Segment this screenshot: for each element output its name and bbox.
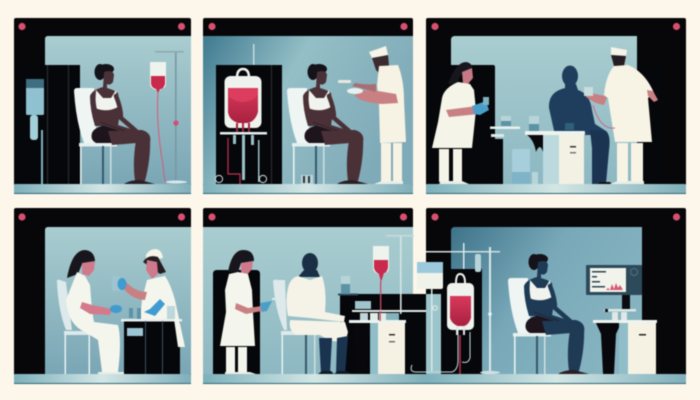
black cabinet xyxy=(14,65,80,184)
black cabinets xyxy=(426,65,665,184)
dark patient xyxy=(549,66,612,184)
seated nurse xyxy=(66,250,126,374)
large blood bag xyxy=(447,274,474,374)
desk with devices and white cabinet xyxy=(593,309,657,374)
nurse with blue glove xyxy=(220,250,279,374)
right nurse with cup and tube xyxy=(584,47,658,184)
pink corner dots xyxy=(18,23,185,30)
chair xyxy=(57,280,97,374)
chair and dark patient xyxy=(508,254,589,374)
panel: donor seated with IV bag xyxy=(14,18,191,194)
pink corner dots xyxy=(431,23,680,30)
panel: nurse preparing donor beside large blood bag xyxy=(203,18,413,194)
black cabinet xyxy=(216,65,282,184)
patient in white xyxy=(286,253,352,374)
floor xyxy=(203,184,413,194)
black screen behind nurse xyxy=(213,270,260,374)
shelf with tubes and wheels xyxy=(215,132,267,194)
desk with white cabinet xyxy=(349,320,406,374)
pink corner dots xyxy=(208,213,407,221)
pink corner dots xyxy=(18,213,185,221)
floor xyxy=(426,184,686,194)
pink corner dots xyxy=(431,213,680,221)
desk with white cabinet and glass xyxy=(525,116,585,184)
pink corner dots xyxy=(208,23,408,30)
standing nurse with glass xyxy=(112,249,185,347)
icon: wall-mounted fluid container xyxy=(26,79,44,184)
left table with glass xyxy=(490,116,520,137)
water jug and vial xyxy=(512,149,538,184)
nurse with syringe and bowl xyxy=(338,46,406,184)
white reservoir box xyxy=(411,262,458,372)
panel: two nurses with dark seated patient xyxy=(426,18,686,194)
chair xyxy=(273,280,321,374)
panel: patient beside monitor and blood bag xyxy=(411,208,686,384)
seated woman xyxy=(74,64,155,184)
IV stand with blood bag xyxy=(373,235,414,321)
panel: nurse attending patient in white with IV xyxy=(203,208,428,384)
IV stand with blood bag xyxy=(150,51,187,184)
glass on upper shelf xyxy=(338,276,358,296)
left nurse with blue gloves xyxy=(432,62,489,184)
floor xyxy=(203,374,426,384)
monitor with chart xyxy=(586,265,642,309)
black lower wall xyxy=(340,294,426,374)
instrument shelf with devices xyxy=(352,301,428,322)
light strip and black cabinet xyxy=(426,269,482,374)
black cabinet with tabletop xyxy=(121,319,182,374)
beakers on table xyxy=(129,306,175,319)
small bottles xyxy=(301,175,313,184)
panel: seated nurse and standing nurse with glass xyxy=(14,208,191,384)
large blood bag xyxy=(224,69,262,132)
floor xyxy=(14,374,191,384)
seated woman xyxy=(287,64,368,184)
stand crossbar and pole xyxy=(426,243,500,374)
floor xyxy=(426,374,686,384)
floor xyxy=(14,184,191,194)
